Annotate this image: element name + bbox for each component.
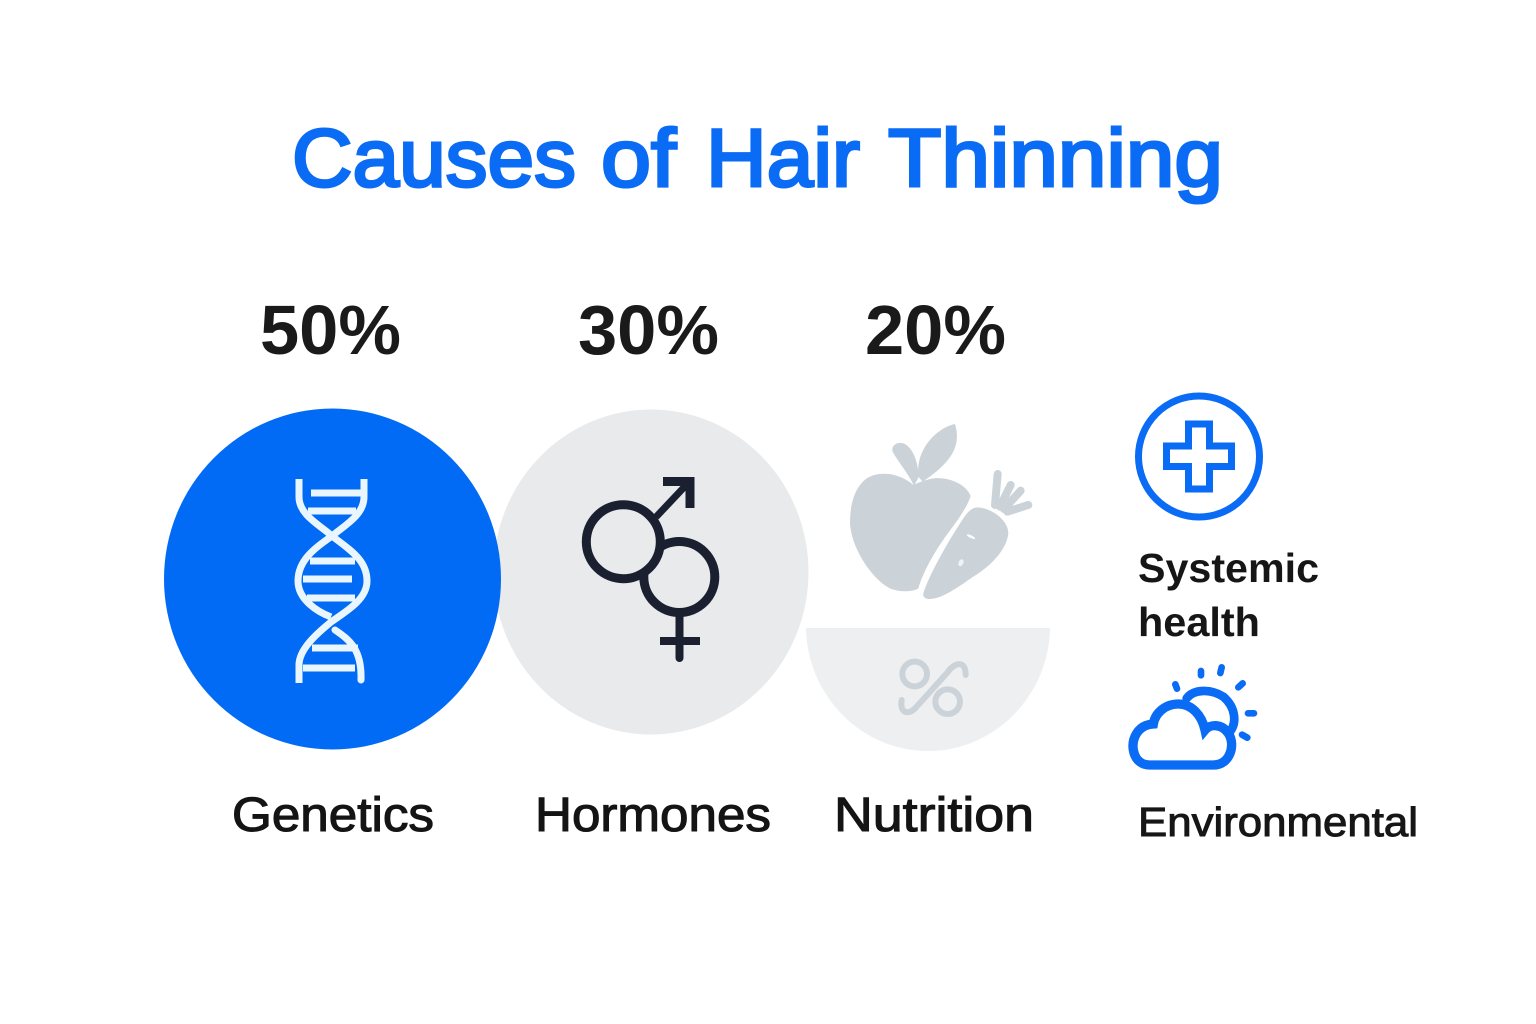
nutrition bowl	[806, 628, 1050, 751]
hormones circle	[494, 410, 808, 734]
title: Causes	[292, 113, 576, 204]
stat: 20%: 20%	[865, 291, 1006, 369]
label: Nutrition: Nutrition	[834, 789, 1034, 842]
icon: percent sign	[901, 662, 966, 714]
icon: gender symbols	[586, 482, 715, 658]
genetics circle	[164, 408, 501, 750]
label: Systemic health: health	[1138, 599, 1260, 645]
stat: 30%: 30%	[578, 291, 719, 369]
label: Hormones: Hormones	[535, 789, 771, 842]
label: Genetics: Genetics	[232, 789, 434, 842]
title: Hair	[706, 113, 860, 204]
stat: 50%: 50%	[260, 291, 401, 369]
icon: medical cross in circle	[1138, 396, 1260, 517]
title: of	[601, 113, 676, 204]
label: Systemic health: Systemic	[1138, 545, 1319, 591]
label: Environmental: Environmental	[1138, 799, 1418, 845]
icon: DNA helix	[298, 479, 367, 683]
icon: apple and carrot	[850, 424, 1028, 599]
title: Thinning	[888, 113, 1223, 204]
icon: cloud and sun	[1133, 667, 1254, 765]
